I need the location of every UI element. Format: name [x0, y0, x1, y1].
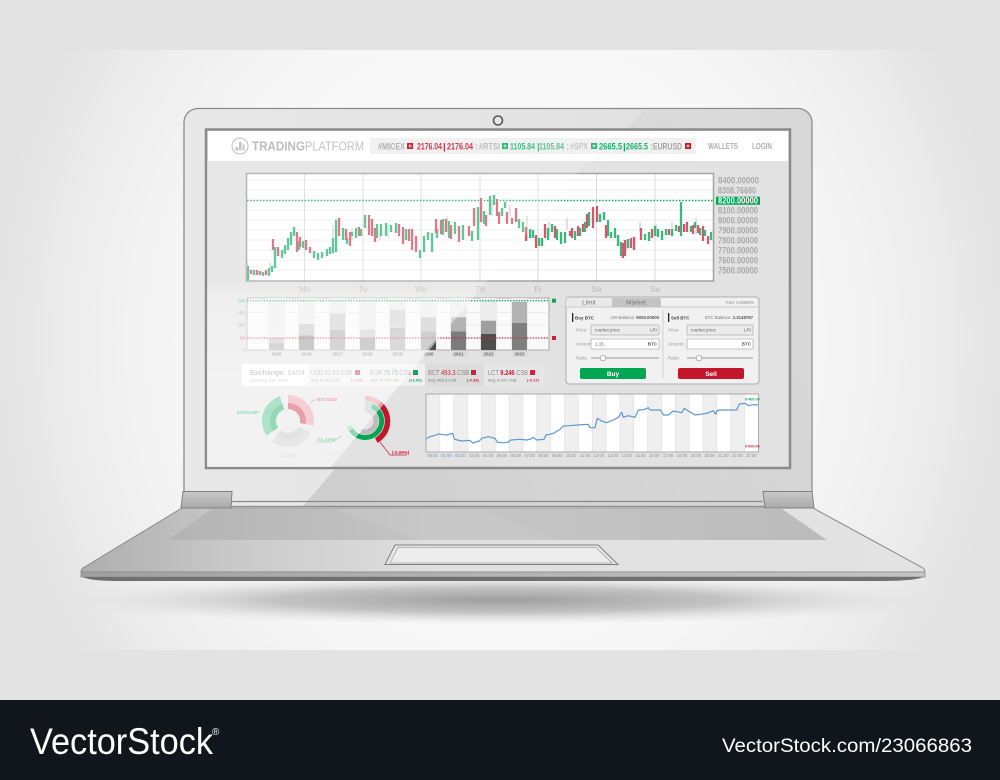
USD: Avg: 61.31 CSB — [311, 378, 340, 382]
price axis labels: 7600.00000 — [718, 256, 758, 266]
tabs: Limit — [582, 300, 596, 306]
LCT — [488, 370, 539, 382]
screen glare — [207, 161, 588, 467]
BCT: BCT 493.3 CSB — [428, 370, 469, 377]
sell form: Sell — [705, 371, 717, 378]
year axis: 2016 — [301, 352, 312, 356]
donut chart: percentage rings — [317, 398, 410, 456]
ticker: 1105.84 — [510, 142, 536, 152]
exchange label — [250, 370, 305, 382]
ticker: EURUSD — [653, 142, 682, 152]
time axis: 13:00 — [607, 453, 619, 458]
price axis labels: 7500.00000 — [718, 266, 758, 276]
price line — [426, 403, 758, 443]
sell form: Sell BTC — [671, 316, 690, 320]
USD: (-0.63) — [351, 378, 363, 382]
time axis: 22:00 — [732, 453, 743, 458]
sell form: LRI — [744, 328, 751, 332]
day axis labels: Sa — [592, 285, 602, 294]
time axis: 01:00 — [441, 453, 452, 458]
exchange label: Exchange: 14/04 — [250, 370, 305, 377]
footer logo: VectorStock — [30, 721, 213, 762]
year axis: 2020 — [423, 352, 434, 356]
keyboard recess — [167, 509, 827, 540]
donut chart: currency pairs: EUR/USD — [237, 410, 258, 415]
time axis: 05:00 — [497, 453, 508, 458]
order panel — [566, 297, 759, 384]
time axis: 07:00 — [524, 453, 536, 458]
year axis: 2017 — [332, 352, 343, 356]
tabs: Fee: 0.0050% — [726, 300, 754, 305]
laptop lid — [184, 108, 812, 506]
USD — [311, 370, 363, 382]
day axis labels: Su — [650, 285, 660, 294]
sell form: BTC Balance: 2.3148767 — [705, 315, 754, 320]
time axis: 06:00 — [510, 453, 522, 458]
buy form: LRI Balance: 9000.00000 — [610, 315, 660, 320]
price axis labels: 8400.00000 — [718, 176, 759, 186]
header bar — [208, 131, 788, 161]
footer registered mark: ® — [212, 727, 220, 738]
year axis: 2021 — [453, 352, 464, 356]
navigation links — [708, 142, 772, 151]
donut chart: currency pairs — [237, 397, 338, 458]
exchange rates row — [242, 364, 545, 386]
sell form: market price — [691, 328, 716, 332]
LCT: Avg: 9.347 CSB — [488, 378, 517, 382]
ticker: 2665.5 — [626, 142, 649, 152]
day axis labels: Th — [475, 285, 485, 294]
USD: USD 61.63 CSB — [311, 370, 352, 377]
time axis: 11:00 — [580, 453, 591, 458]
red candles — [251, 198, 708, 275]
wick shadows — [247, 200, 696, 281]
navigation links: WALLETS — [708, 142, 739, 151]
day axis labels: Tu — [358, 285, 368, 294]
time axis: 10:00 — [566, 453, 577, 458]
EUR: (+1.00) — [409, 378, 422, 382]
time axis: 20:00 — [704, 453, 716, 458]
price axis labels: 8308.76680 — [718, 186, 756, 196]
EUR — [370, 370, 422, 382]
line chart range labels — [745, 398, 760, 448]
ticker: 2176.04 — [417, 142, 443, 152]
threshold markers — [552, 299, 556, 340]
donut chart: currency pairs: BTC/USD — [317, 397, 338, 402]
trackpad — [385, 545, 618, 564]
ticker: : — [566, 142, 569, 152]
ticker: | — [623, 142, 626, 152]
ticker: | — [537, 142, 540, 152]
time axis: 18:00 — [677, 453, 688, 458]
BCT — [428, 370, 479, 382]
ticker — [370, 138, 696, 154]
price axis labels — [718, 176, 759, 276]
navigation links: LOGIN — [752, 142, 772, 151]
ticker: 2176.04 — [447, 142, 474, 152]
buy form: Buy BTC — [575, 316, 595, 320]
buy form: BTC — [648, 342, 658, 346]
LCT: LCT 9.246 CSB — [488, 370, 528, 377]
ticker: : — [475, 142, 478, 152]
line chart — [426, 394, 760, 458]
footer url: VectorStock.com/23066863 — [722, 736, 972, 757]
green candles — [248, 195, 711, 281]
screen contents — [208, 131, 788, 458]
laptop screen — [206, 130, 790, 468]
day axis labels: Fr — [534, 285, 542, 294]
price axis labels: 8000.00000 — [718, 216, 758, 226]
price axis labels: 7900.00000 — [718, 226, 758, 236]
buy form — [572, 313, 660, 379]
price axis labels: 8100.00000 — [718, 206, 758, 216]
ticker: 1105.84 — [539, 142, 565, 152]
bar chart — [237, 298, 556, 357]
time axis: 23:00 — [746, 453, 757, 458]
left hinge — [181, 492, 232, 508]
sell form — [668, 313, 754, 379]
tabs: Market — [626, 300, 646, 306]
dashed target line marker: 8200.00000 — [718, 196, 758, 206]
time axis: 09:00 — [552, 453, 563, 458]
ticker: #SPX — [570, 142, 588, 152]
bars — [269, 302, 527, 350]
time axis: 19:00 — [691, 453, 702, 458]
time axis: 03:00 — [469, 453, 480, 458]
day axis labels: We — [415, 285, 427, 294]
price axis labels: 7800.00000 — [718, 236, 758, 246]
value axis: 0 — [242, 348, 245, 352]
year axis: 2023 — [514, 352, 525, 356]
year axis: 2022 — [483, 352, 494, 356]
price axis labels: 7700.00000 — [718, 246, 758, 256]
buy form: Price: — [576, 328, 588, 332]
ticker: | — [443, 142, 446, 152]
value axis: 100 — [237, 322, 245, 328]
tabs — [566, 298, 759, 307]
buy form: 1.15 — [595, 342, 604, 346]
EUR: EUR 75.75 CSB — [370, 370, 411, 377]
year axis — [271, 351, 528, 357]
right hinge — [763, 492, 814, 508]
BCT: Avg: 493.3 CSB — [428, 378, 457, 382]
donut chart: percentage rings: (-0.09%) — [392, 450, 410, 455]
buy form: Amount: — [576, 342, 593, 346]
time axis: 12:00 — [594, 453, 605, 458]
laptop shadow — [55, 575, 945, 625]
value axis — [237, 298, 245, 352]
BCT: (-0.38) — [467, 378, 479, 382]
line chart range labels: 9 400.00 — [745, 398, 760, 402]
buy form: LRI — [650, 328, 657, 332]
footer bar — [0, 700, 1000, 780]
time axis: 21:00 — [718, 453, 729, 458]
buy form: Buy — [607, 371, 620, 378]
ticker: 2665.5 — [599, 142, 623, 152]
ticker: #MICEX — [378, 142, 406, 152]
value axis: 150 — [237, 310, 245, 315]
laptop base — [81, 492, 925, 581]
laptop — [81, 108, 925, 581]
line chart range labels: 9 000.00 — [745, 444, 760, 448]
EUR: Avg: 75.75 CSB — [370, 378, 399, 382]
time axis — [427, 453, 757, 458]
time axis: 17:00 — [663, 453, 674, 458]
time axis: 08:00 — [538, 453, 549, 458]
ticker: : — [650, 142, 653, 152]
time axis: 00:00 — [427, 453, 438, 458]
value axis: 50 — [240, 336, 245, 340]
year axis: 2015 — [271, 352, 282, 356]
value axis: 200 — [237, 298, 245, 304]
buy form: market price — [595, 328, 620, 332]
time axis: 02:00 — [455, 453, 466, 458]
donut chart: currency pairs: LTC/BTC — [279, 453, 299, 458]
exchange label: Exchange rate: 15/04 — [250, 378, 289, 382]
logo: PLATFORM — [305, 140, 364, 154]
donut chart: percentage rings: LTC/USD — [322, 451, 342, 456]
time axis: 04:00 — [483, 453, 494, 458]
day axis labels: Mo — [299, 285, 311, 294]
time axis: 16:00 — [649, 453, 660, 458]
front edge — [81, 572, 925, 581]
year axis: 2019 — [392, 352, 403, 356]
donut chart: percentage rings: (+1.23%) — [317, 437, 336, 442]
sell form: Ratio: — [668, 356, 680, 360]
sell form: BTC — [742, 342, 752, 346]
logo — [232, 138, 364, 154]
ticker: #RTSI — [479, 142, 500, 152]
logo: TRADING — [252, 140, 305, 154]
sell form: Price: — [668, 328, 680, 332]
time axis: 14:00 — [621, 453, 632, 458]
buy form: Ratio: — [576, 356, 588, 360]
day axis labels — [299, 285, 660, 294]
year axis: 2018 — [362, 352, 373, 356]
time axis: 15:00 — [635, 453, 646, 458]
icon: webcam — [494, 116, 502, 125]
candlestick chart — [246, 174, 760, 294]
sell form: Amount: — [668, 342, 685, 346]
deck — [81, 508, 925, 572]
LCT: (-0.17) — [527, 378, 539, 382]
